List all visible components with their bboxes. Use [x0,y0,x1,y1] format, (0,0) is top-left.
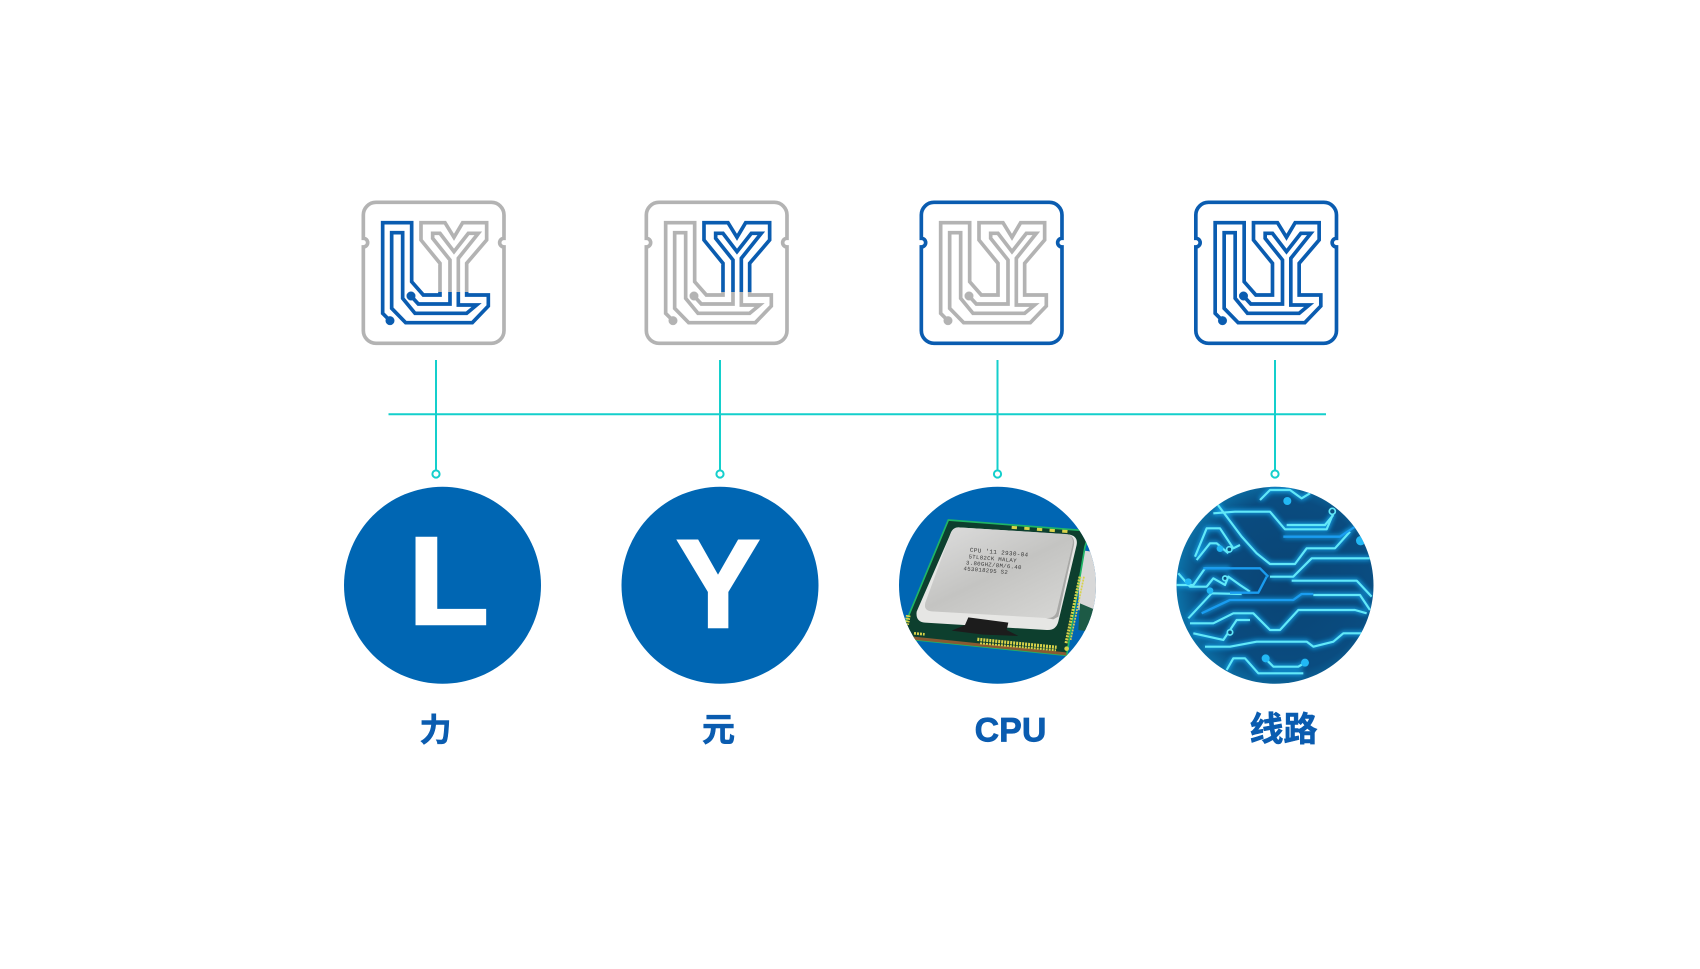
lid [917,527,1077,630]
label: 力: 力 [419,712,452,748]
label: 线路: 线路 [1250,711,1318,749]
logo: CPU frame highlighted [921,202,1062,343]
latch [952,617,1018,636]
circle: Y: Y [676,515,760,654]
logo: Y highlighted [646,202,787,343]
label: CPU: CPU [975,712,1046,750]
chip marking: 3.80GHZ/8M/6.40 [966,559,1022,571]
chip marking: 5TL82CK MALAY [968,553,1017,564]
logo: L highlighted [363,202,504,343]
circuit board [903,520,1090,655]
chip marking [964,548,1028,574]
circle: CPU photo [899,487,1103,684]
pad rows [907,527,1084,650]
traces [1177,490,1372,673]
circle: L: L [408,511,489,651]
chip marking: 453018295 S2 [963,565,1008,576]
label: 元: 元 [702,711,735,748]
circle: Y [622,487,818,684]
pads [1185,497,1365,667]
second chip behind [1078,550,1096,614]
connector lines [388,360,1326,478]
chip marking: CPU '11 2930-04 [970,547,1029,559]
logo: full colour circuit [1196,202,1336,343]
circle: circuit photo [1176,487,1374,684]
circle: L [344,487,541,684]
glow [1177,490,1372,673]
